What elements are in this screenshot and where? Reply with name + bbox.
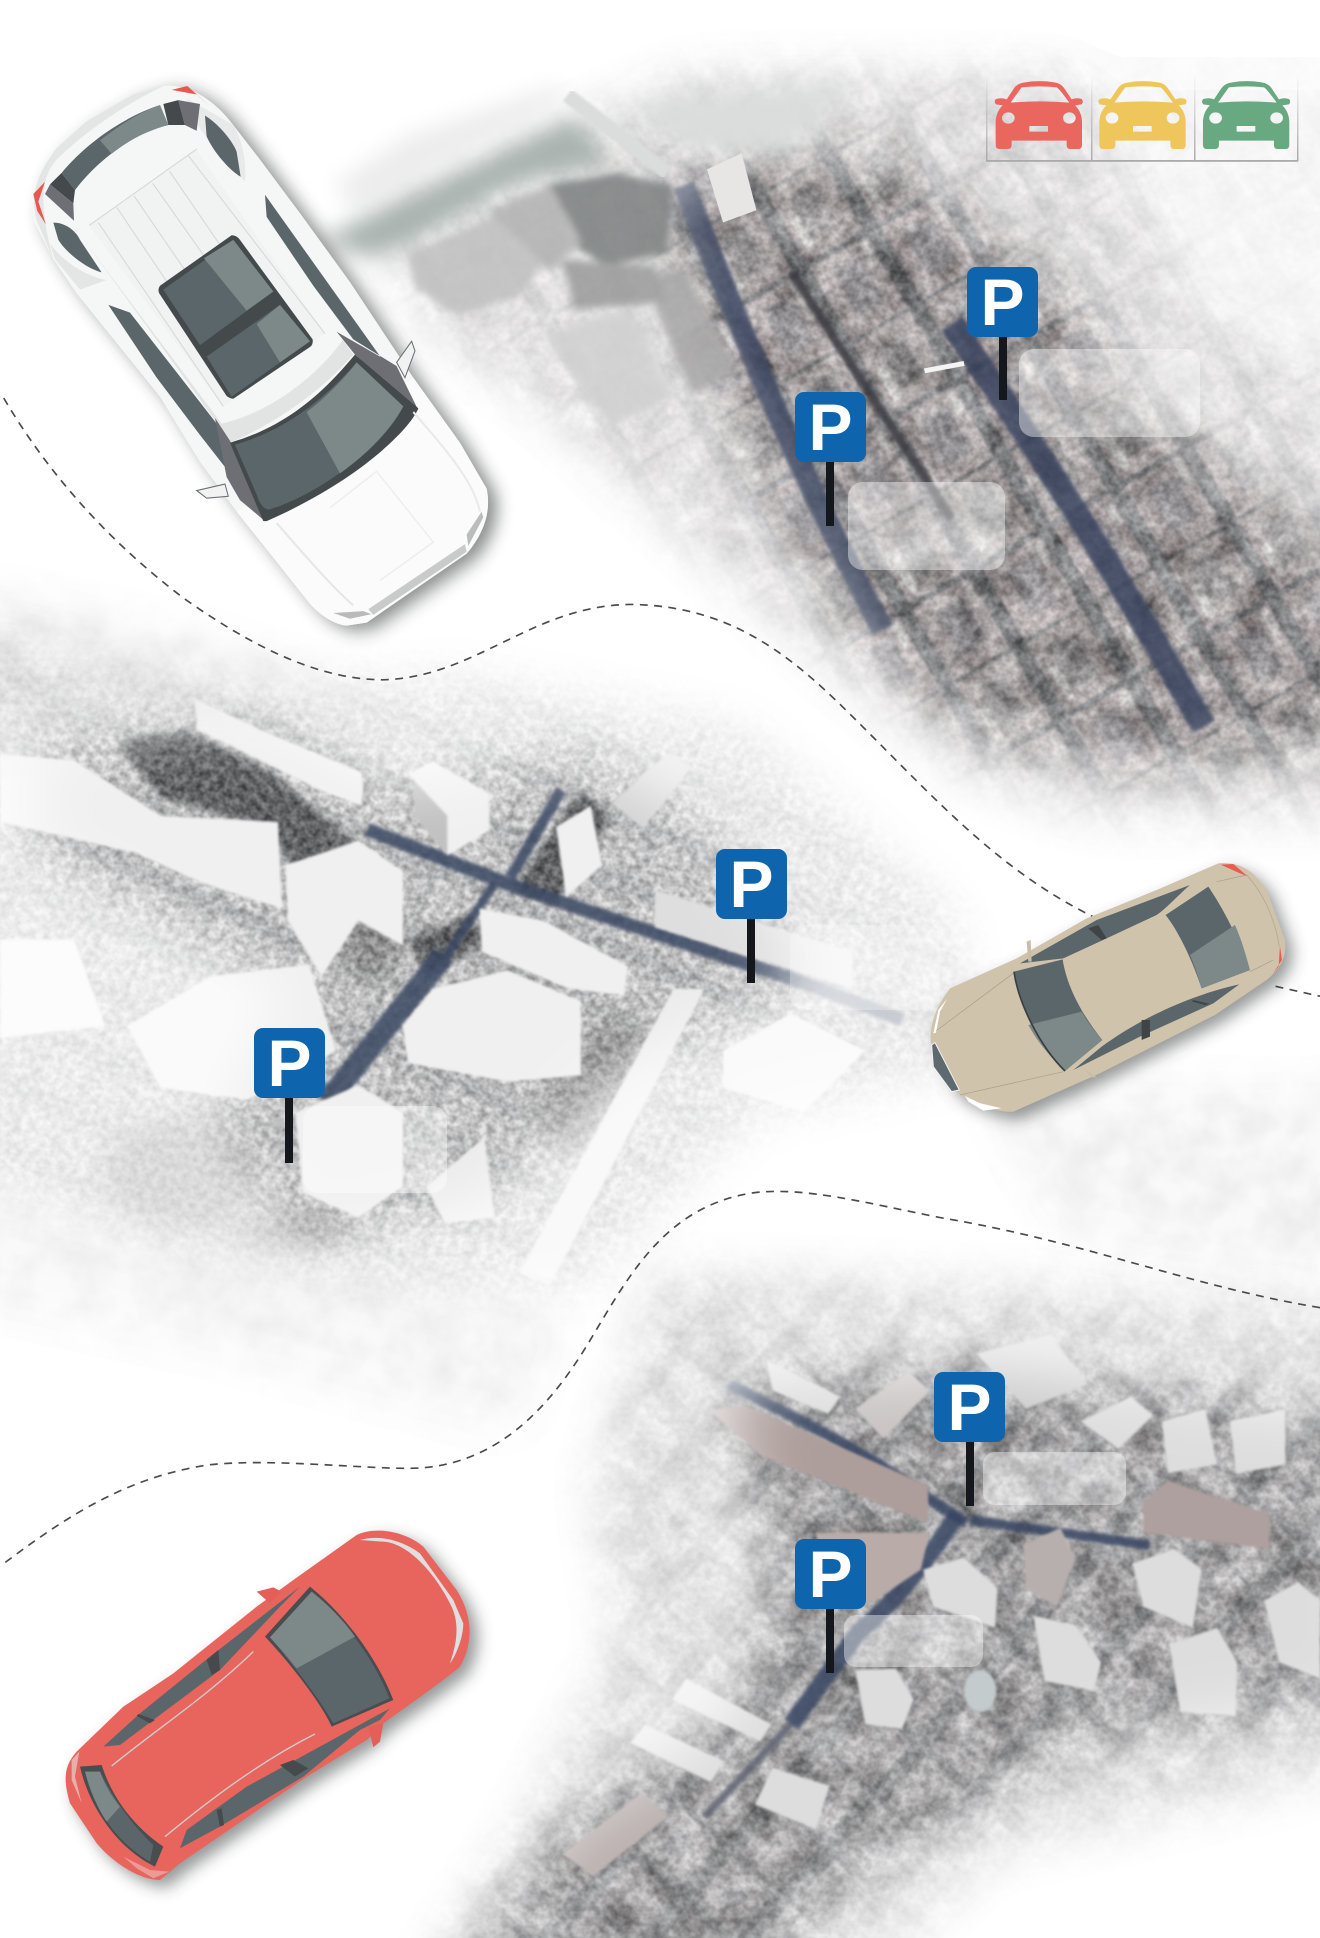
parking sign 3: P xyxy=(729,847,774,921)
car: white SUV top view xyxy=(33,86,497,631)
windshield xyxy=(215,418,265,521)
river with bridge and riverside buildings xyxy=(320,80,853,426)
rear lights xyxy=(72,1752,82,1803)
body lines xyxy=(935,875,1273,1095)
tail lights xyxy=(172,86,211,107)
side windows xyxy=(103,1587,300,1747)
hood detail xyxy=(330,471,433,580)
pale parking area highlights xyxy=(303,349,1200,1667)
parking sign 4 xyxy=(254,1026,325,1163)
mirrors xyxy=(1027,940,1032,962)
parking sign 2 xyxy=(795,390,866,526)
legend: parking bays with coloured cars xyxy=(986,75,1298,162)
parking sign 6 xyxy=(795,1537,866,1673)
front light strip xyxy=(360,1538,463,1663)
grille and headlights xyxy=(368,544,467,615)
aerial: neighbourhood bottom right xyxy=(428,1258,1320,1938)
route: dashed line upper xyxy=(4,398,1320,996)
icon: yellow car xyxy=(1098,81,1187,149)
aerial: dense city blocks top right xyxy=(376,54,1320,836)
icon: green car xyxy=(1202,81,1290,149)
parking sign 5: P xyxy=(947,1370,992,1444)
faint outer haze xyxy=(0,599,1320,1408)
car: beige sedan top view xyxy=(931,863,1293,1119)
side windows xyxy=(1020,885,1190,963)
car: red hatchback top view xyxy=(66,1531,478,1887)
parking sign 5 xyxy=(934,1370,1005,1506)
roof rails xyxy=(112,1652,253,1766)
parking sign 1: P xyxy=(980,265,1025,339)
mirrors xyxy=(397,341,415,378)
parking sign 4: P xyxy=(267,1026,312,1100)
windshield xyxy=(265,1587,393,1727)
parking sign 2: P xyxy=(808,390,853,464)
rear window xyxy=(1166,887,1250,988)
route: dashed line lower xyxy=(4,1191,1320,1564)
rear window xyxy=(80,1765,163,1867)
white highlight roof xyxy=(925,363,964,371)
windshield xyxy=(1014,959,1102,1071)
rear window and pillars xyxy=(62,105,168,190)
parking sign 6: P xyxy=(808,1537,853,1611)
mirrors xyxy=(257,1587,282,1603)
parking sign 1 xyxy=(967,265,1038,400)
aerial: residential towers centre left xyxy=(0,634,977,1300)
roof xyxy=(75,125,353,443)
side windows xyxy=(265,195,397,366)
parking sign 3 xyxy=(716,847,787,983)
sunroof xyxy=(158,235,313,399)
lights and grille xyxy=(933,998,947,1033)
icon: red car xyxy=(995,81,1083,149)
